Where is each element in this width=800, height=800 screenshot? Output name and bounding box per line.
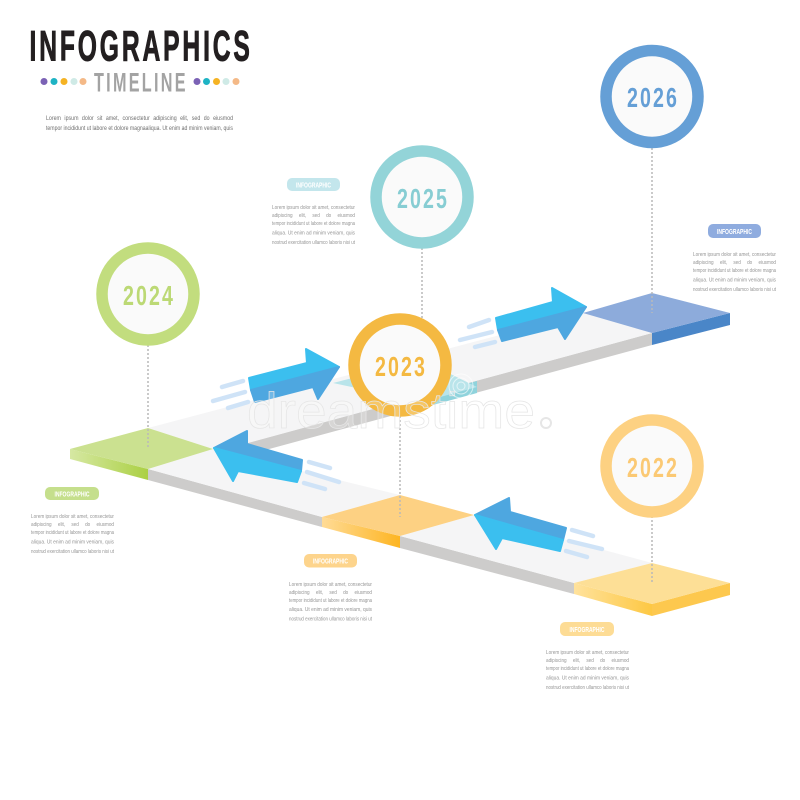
callout: 2024: Lorem ipsum dolor sit amet, consectetur: [31, 514, 114, 520]
marker: 2022: [606, 420, 698, 512]
callout: 2024: adipiscing elit, sed do eiusmod: [31, 522, 114, 528]
callout: 2026: adipiscing elit, sed do eiusmod: [693, 260, 776, 266]
decorative dots left: [40, 78, 86, 85]
upper strip side: [247, 333, 652, 455]
callout: 2023: tempor incididunt ut labore et dolore magna: [289, 598, 373, 604]
subheading: timeline: TIMELINE: [94, 67, 188, 98]
callout: 2026: [693, 224, 777, 293]
callout: 2025: tempor incididunt ut labore et dolore magna: [272, 221, 356, 227]
callout: 2023: adipiscing elit, sed do eiusmod: [289, 590, 372, 596]
callout: 2026: tempor incididunt ut labore et dolore magna: [693, 268, 777, 274]
marker: 2024: [102, 248, 194, 340]
callout: 2022: adipiscing elit, sed do eiusmod: [546, 658, 629, 664]
marker: 2025: 2025: [397, 184, 449, 215]
callout: 2026: nostrud exercitation ullamco laboris nisi ut: [693, 287, 776, 293]
marker: 2022: 2022: [627, 453, 679, 484]
arrow: 2024 to 2025: [213, 349, 339, 408]
lower strip right side: [400, 536, 574, 594]
marker: 2025: [376, 151, 468, 243]
marker: 2024: 2024: [123, 281, 175, 312]
callout: 2022: aliqua. Ut enim ad minim veniam, quis: [546, 676, 629, 682]
marker: 2023: [354, 319, 446, 411]
callout: 2022: INFOGRAPHIC: [570, 627, 604, 634]
callout: 2024: tempor incididunt ut labore et dolore magna: [31, 530, 115, 536]
2022 platform: [574, 563, 730, 616]
callout: 2022: nostrud exercitation ullamco laboris nisi ut: [546, 685, 629, 691]
arrow: 2025 to 2026: [460, 288, 586, 347]
watermark: dreamstime: [247, 383, 535, 439]
lower strip left top: [148, 449, 400, 517]
marker: 2026: [606, 50, 698, 142]
callout: 2025: [272, 178, 356, 246]
callout: 2025: INFOGRAPHIC: [296, 182, 331, 190]
heading: infographics: INFOGRAPHICS: [30, 22, 253, 70]
title block: [30, 22, 253, 132]
lower strip right top: [400, 515, 652, 583]
callout: 2024: aliqua. Ut enim ad minim veniam, quis: [31, 540, 114, 546]
intro text: tempor incididunt ut labore et dolore magnaaliqua. Ut enim ad minim veniam, quis: [46, 125, 234, 132]
callout: 2026: Lorem ipsum dolor sit amet, consectetur: [693, 252, 776, 258]
callout: 2023: aliqua. Ut enim ad minim veniam, quis: [289, 607, 372, 613]
2026 platform: [583, 293, 730, 345]
callout: 2025: adipiscing elit, sed do eiusmod: [272, 213, 355, 219]
callout: 2023: [289, 554, 373, 622]
callout: 2023: INFOGRAPHIC: [313, 558, 348, 566]
callout: 2022: [546, 622, 630, 691]
intro text: [46, 115, 234, 132]
2025 platform: [333, 360, 477, 408]
callout: 2025: aliqua. Ut enim ad minim veniam, quis: [272, 230, 355, 236]
callout: 2024: nostrud exercitation ullamco laboris nisi ut: [31, 549, 114, 555]
callout: 2025: Lorem ipsum dolor sit amet, consectetur: [272, 205, 355, 211]
callout: 2025: nostrud exercitation ullamco laboris nisi ut: [272, 240, 355, 246]
arrow: 2023 to 2024: [214, 431, 339, 489]
marker: 2023: 2023: [375, 352, 427, 383]
marker: 2026: 2026: [627, 83, 679, 114]
callout: 2022: tempor incididunt ut labore et dolore magna: [546, 666, 630, 672]
2023 platform: [322, 495, 474, 548]
callout: 2022: Lorem ipsum dolor sit amet, consectetur: [546, 650, 629, 656]
callout: 2023: Lorem ipsum dolor sit amet, consectetur: [289, 582, 372, 588]
arrow: 2022 to 2023: [475, 498, 602, 557]
lower strip left side: [148, 469, 322, 527]
2024 platform: [70, 428, 213, 480]
decorative dots right: [194, 78, 240, 85]
callout: 2026: aliqua. Ut enim ad minim veniam, quis: [693, 278, 776, 284]
callout: 2023: nostrud exercitation ullamco laboris nisi ut: [289, 616, 372, 622]
callout: 2024: INFOGRAPHIC: [54, 492, 90, 498]
upper strip top: [148, 313, 652, 449]
dotted connectors: [148, 148, 652, 583]
intro text: Lorem ipsum dolor sit amet, consectetur adipiscing elit, sed do eiusmod: [46, 115, 233, 122]
timeline track: [70, 293, 730, 616]
callout: 2024: [31, 487, 115, 555]
callout: 2026: INFOGRAPHIC: [717, 229, 752, 236]
